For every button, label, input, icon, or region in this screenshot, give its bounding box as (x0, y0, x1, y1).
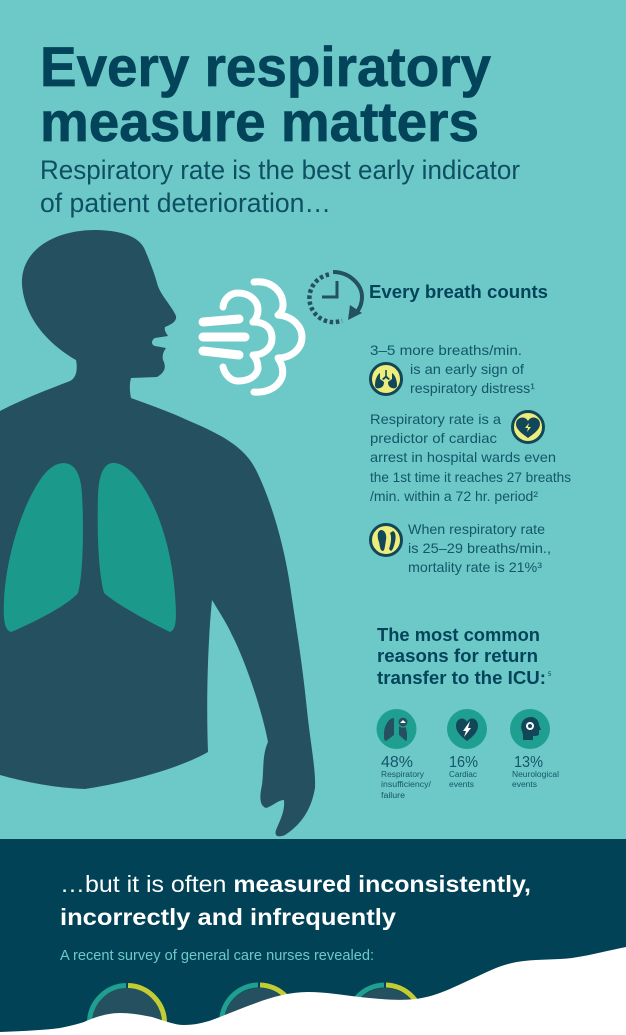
heading: reasons for return (377, 625, 552, 688)
stat: neurological: Neurological (512, 770, 559, 779)
text: breaths block (370, 342, 535, 396)
text: cardiac arrest block (370, 411, 571, 504)
stat: respiratory: insufficiency/ (381, 780, 432, 789)
subtitle (40, 155, 520, 218)
chart: donut 2 (221, 985, 297, 1035)
text: breaths block: respiratory distress¹ (410, 380, 535, 396)
panel: bottom survey band (0, 839, 626, 1035)
right lung (98, 463, 176, 632)
heading: measured inconsistently: incorrectly and infrequently (60, 904, 396, 930)
heading: reasons for return: reasons for return (377, 646, 538, 666)
text: cardiac arrest block: arrest in hospital wards even (370, 449, 556, 465)
torn paper edge (0, 947, 626, 1035)
title: Every respiratory (40, 35, 491, 98)
stat: cardiac (447, 709, 487, 789)
text: cardiac arrest block: Respiratory rate is a (370, 411, 501, 427)
heading: reasons for return: The most common (377, 625, 540, 645)
stat: neurological: events (512, 780, 537, 789)
title: measure matters (40, 90, 479, 153)
text: survey intro: A recent survey of general care nurses revealed: (60, 948, 374, 964)
heading: measured inconsistently (60, 871, 531, 930)
stat: cardiac: 16% (449, 754, 478, 771)
heading: every breath counts: Every breath counts (369, 282, 548, 302)
icon: breath cloud (203, 282, 302, 392)
text: breaths block: 3–5 more breaths/min. (370, 342, 522, 358)
stat: respiratory: failure (381, 791, 406, 800)
subtitle: of patient deterioration… (40, 188, 331, 218)
icon: clock with arrow (309, 272, 362, 322)
text: mortality block: is 25–29 breaths/min., (408, 540, 551, 556)
chart: donut 3 (347, 985, 423, 1035)
stat: cardiac: Cardiac (449, 770, 477, 779)
text: mortality block: When respiratory rate (408, 521, 545, 537)
heading: reasons for return: transfer to the ICU: (377, 668, 546, 688)
stat: cardiac: events (449, 780, 474, 789)
stat: respiratory: 48% (381, 754, 413, 771)
chart: donut 1 (89, 986, 164, 1035)
text: mortality block (408, 521, 551, 575)
left lung (4, 463, 83, 632)
heading: reasons for return: 5 (548, 672, 552, 678)
heading: measured inconsistently: …but it is often measured inconsistently, (60, 871, 531, 897)
human silhouette (0, 230, 315, 836)
icon: heart badge (512, 412, 544, 442)
stat: respiratory (376, 709, 432, 800)
stat: neurological (510, 709, 559, 789)
icon: mortality badge (370, 524, 402, 556)
stat: neurological: 13% (514, 754, 543, 771)
text: cardiac arrest block: the 1st time it reaches 27 breaths (370, 469, 571, 485)
stat: respiratory: Respiratory (381, 770, 424, 779)
text: cardiac arrest block: predictor of cardiac (370, 430, 497, 446)
text: mortality block: mortality rate is 21%³ (408, 559, 542, 575)
text: breaths block: is an early sign of (410, 361, 524, 377)
text: cardiac arrest block: /min. within a 72 hr. period² (370, 488, 538, 504)
subtitle: Respiratory rate is the best early indicator (40, 155, 520, 185)
icon: lungs badge (370, 364, 402, 394)
title (40, 35, 491, 153)
